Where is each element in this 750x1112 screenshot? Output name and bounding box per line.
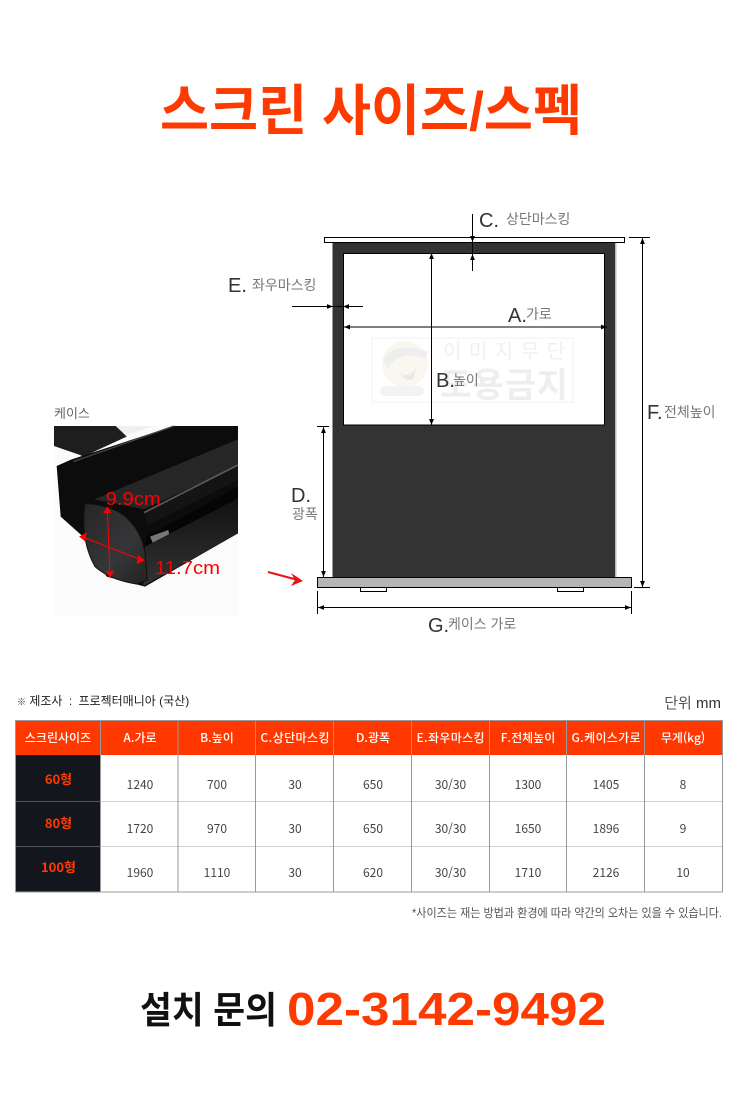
table row: 100: 2126 <box>593 864 620 881</box>
table row: 60: 650 <box>363 776 383 793</box>
dimension A: A. <box>508 305 527 327</box>
dimension D: 광폭 <box>292 506 318 522</box>
table row: 100: 1710 <box>515 864 542 881</box>
dimension G: G. <box>428 615 449 637</box>
table row: 100: 620 <box>363 864 383 881</box>
table header row: F.전체높이 <box>501 729 555 746</box>
table row: 60 <box>127 776 687 793</box>
dimension A <box>344 305 607 327</box>
footnote: *사이즈는 재는 방법과 환경에 따라 약간의 오차는 있을 수 있습니다. <box>412 905 722 920</box>
table row: 80: 1650 <box>515 820 542 837</box>
screen body <box>332 243 616 577</box>
table header row: 스크린사이즈 <box>25 729 91 746</box>
case label: 케이스 <box>54 406 90 421</box>
dimension F: F. <box>647 402 663 424</box>
table row: 80: 1720 <box>127 820 154 837</box>
table row: 60: 700 <box>207 776 227 793</box>
table row: 100: 30 <box>288 864 302 881</box>
unit label: 단위 mm <box>664 695 721 712</box>
dimension C: C. <box>479 210 499 232</box>
table header row: A.가로 <box>123 729 157 746</box>
table header row: D.광폭 <box>356 729 390 746</box>
table header row: E.좌우마스킹 <box>416 729 484 746</box>
table header row: C.상단마스킹 <box>260 729 330 746</box>
table row: 80 <box>127 820 686 837</box>
dimension G <box>318 591 632 637</box>
table row: 80: 970 <box>207 820 227 837</box>
table header row: 무게(kg) <box>661 729 705 746</box>
table row: 60: 1405 <box>593 776 620 793</box>
top bar <box>324 238 624 242</box>
table row: 100: 10 <box>676 864 690 881</box>
table header row <box>15 720 723 755</box>
photo: case end view <box>54 426 238 617</box>
table row: 100: 1110 <box>204 864 231 881</box>
watermark <box>372 338 573 405</box>
table row: 80: 9 <box>680 820 686 837</box>
dimension E: E. <box>228 275 247 297</box>
contact: install inquiry: 설치 문의 <box>140 990 277 1031</box>
dimension E <box>228 275 363 306</box>
table size column: 80형 <box>45 813 72 832</box>
table row: 100: 30/30 <box>435 864 467 881</box>
dimension F: 전체높이 <box>664 404 716 420</box>
panel: screen diagram <box>228 210 716 637</box>
dimension E: 좌우마스킹 <box>252 277 316 293</box>
table row: 100: 1960 <box>127 864 154 881</box>
dimension F <box>629 238 716 588</box>
table row: 80: 30/30 <box>435 820 467 837</box>
contact: install inquiry <box>140 983 606 1035</box>
dimension C: 상단마스킹 <box>506 211 570 227</box>
photo: case end view: 11.7cm <box>155 557 220 578</box>
dimension D: D. <box>291 485 311 507</box>
table row: 100 <box>127 864 690 881</box>
contact: install inquiry: 02-3142-9492 <box>287 983 606 1035</box>
title: 스크린 사이즈/스펙 <box>160 80 582 142</box>
table row: 60: 1240 <box>127 776 154 793</box>
table row: 60: 30/30 <box>435 776 467 793</box>
arrow: red case pointer <box>268 572 303 586</box>
table row: 60: 8 <box>680 776 687 793</box>
table row: 80: 650 <box>363 820 383 837</box>
watermark: 이 미 지 무 단 <box>443 340 565 363</box>
table row: 80: 1896 <box>593 820 620 837</box>
table row: 80: 30 <box>288 820 302 837</box>
table grid <box>16 720 722 892</box>
case bar <box>318 578 632 592</box>
dimension A: 가로 <box>526 306 552 322</box>
manufacturer note: ※ 제조사 : 프로젝터매니아 (국산) <box>17 694 189 708</box>
dimension C <box>472 210 570 271</box>
table size column <box>15 755 100 892</box>
dimension B <box>432 253 479 425</box>
table row: 60: 30 <box>288 776 302 793</box>
table header row: G.케이스가로 <box>572 729 640 746</box>
dimension D <box>291 426 329 577</box>
dimension G: 케이스 가로 <box>448 616 516 632</box>
photo: case end view: 9.9cm <box>106 488 161 509</box>
dimension B: B. <box>436 370 455 392</box>
table row: 60: 1300 <box>515 776 542 793</box>
table size column: 100형 <box>41 857 76 876</box>
spec table <box>15 720 723 892</box>
watermark: 도용금지 <box>440 367 568 405</box>
dimension B: 높이 <box>453 372 479 388</box>
table header row: B.높이 <box>200 729 234 746</box>
table size column: 60형 <box>45 769 72 788</box>
